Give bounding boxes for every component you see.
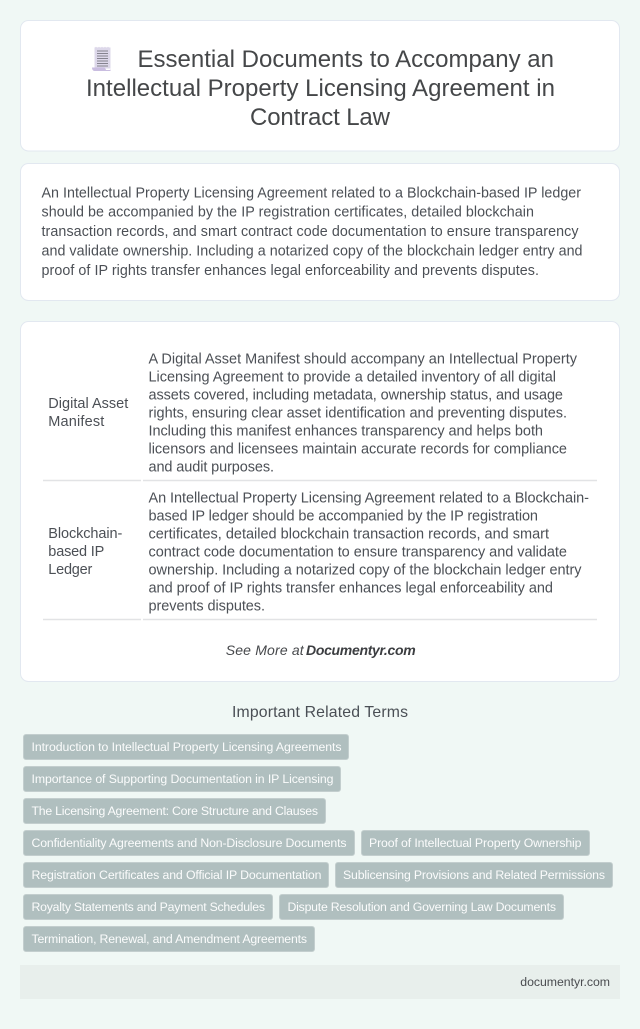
row description: Digital Asset Manifest — [148, 351, 578, 475]
tag — [24, 830, 354, 856]
footer: documentyr.com — [520, 975, 610, 989]
tag: Dispute Resolution and Governing Law Documents — [288, 900, 556, 914]
row label: Blockchain-based IP Ledger: based IP — [48, 544, 104, 560]
row label: Blockchain-based IP Ledger: Ledger — [48, 562, 92, 578]
heading: important related terms: Important Related Terms — [232, 704, 408, 721]
tag — [24, 926, 314, 952]
row label: Blockchain-based IP Ledger: Blockchain- — [48, 526, 122, 542]
row description: Blockchain-based IP Ledger: An Intellectual Property Licensing Agreement related to a Blockchain- — [148, 490, 589, 506]
tag — [24, 862, 328, 888]
row description: Blockchain-based IP Ledger — [148, 490, 589, 614]
text block: intro: proof of IP rights transfer enhances legal enforceability and prevents disputes. — [42, 263, 539, 279]
tag: Registration Certificates and Official IP Documentation — [32, 868, 322, 882]
tag: Proof of Intellectual Property Ownership — [369, 836, 582, 850]
see more link: Documentyr.com — [306, 642, 416, 658]
row description: Blockchain-based IP Ledger: contract code documentation to ensure transparency and validate — [148, 544, 567, 560]
text block: intro: transaction records, and smart contract code documentation to ensure transparency — [42, 224, 579, 240]
row description: Digital Asset Manifest: rights, ensuring clear asset identification and preventing disputes. — [148, 405, 567, 421]
row description: Blockchain-based IP Ledger: ownership. Including a notarized copy of the blockchain ledger entry — [148, 562, 582, 578]
tag: Introduction to Intellectual Property Licensing Agreements — [32, 740, 342, 754]
table row: Digital Asset Manifest — [48, 351, 578, 475]
text block: intro: should be accompanied by the IP registration certificates, detailed blockchain — [42, 205, 534, 221]
table row: Blockchain-based IP Ledger — [48, 490, 589, 614]
tag — [24, 734, 348, 760]
tag — [336, 862, 612, 888]
text block: intro — [42, 185, 583, 279]
panel: document table — [20, 322, 620, 682]
row description: Blockchain-based IP Ledger: based IP ledger should be accompanied by the IP registration — [148, 508, 538, 524]
tag — [24, 894, 272, 920]
footer — [20, 965, 620, 999]
text block: intro: An Intellectual Property Licensing Agreement related to a Blockchain-based IP ledger — [42, 185, 581, 201]
panel: title card — [20, 20, 620, 151]
tag — [24, 798, 326, 824]
title: Contract Law — [250, 104, 391, 131]
tag: Sublicensing Provisions and Related Permissions — [343, 868, 605, 882]
row description: Blockchain-based IP Ledger: certificates, detailed blockchain transaction records, and smart — [148, 526, 549, 542]
row description: Digital Asset Manifest: assets covered, including metadata, ownership status, and usage — [148, 387, 563, 403]
tag — [280, 894, 564, 920]
row description: Digital Asset Manifest: licensors and licensees maintain accurate records for compliance — [148, 441, 567, 457]
row label: Digital Asset Manifest: Digital Asset — [48, 396, 128, 412]
tag: Royalty Statements and Payment Schedules — [32, 900, 265, 914]
tag: Confidentiality Agreements and Non-Disclosure Documents — [32, 836, 346, 850]
see more link — [226, 642, 416, 658]
related terms tags — [24, 734, 612, 952]
row description: Digital Asset Manifest: A Digital Asset Manifest should accompany an Intellectual Property — [148, 351, 578, 367]
tag — [24, 766, 340, 792]
row label: Digital Asset Manifest — [48, 396, 128, 430]
title: Essential Documents to Accompany an — [138, 46, 554, 73]
tag — [362, 830, 590, 856]
panel: intro summary — [20, 164, 620, 300]
row label: Blockchain-based IP Ledger — [48, 526, 122, 578]
row description: Digital Asset Manifest: and audit purposes. — [148, 459, 274, 475]
text block: intro: and validate ownership. Including a notarized copy of the blockchain ledger entry and — [42, 243, 583, 259]
tag: Termination, Renewal, and Amendment Agreements — [32, 932, 307, 946]
row description: Digital Asset Manifest: Licensing Agreement to provide a detailed inventory of all digital — [148, 369, 556, 385]
row description: Blockchain-based IP Ledger: and proof of IP rights transfer enhances legal enforceability and — [148, 580, 553, 596]
title: Intellectual Property Licensing Agreement in — [86, 75, 555, 102]
see more link: See More at — [226, 642, 305, 658]
tag: Importance of Supporting Documentation in IP Licensing — [32, 772, 334, 786]
icon: document scroll — [92, 47, 111, 71]
tag: The Licensing Agreement: Core Structure and Clauses — [32, 804, 318, 818]
row label: Digital Asset Manifest: Manifest — [48, 414, 104, 430]
row description: Digital Asset Manifest: Including this manifest enhances transparency and helps both — [148, 423, 543, 439]
title — [86, 46, 555, 131]
row description: Blockchain-based IP Ledger: prevents disputes. — [148, 598, 265, 614]
